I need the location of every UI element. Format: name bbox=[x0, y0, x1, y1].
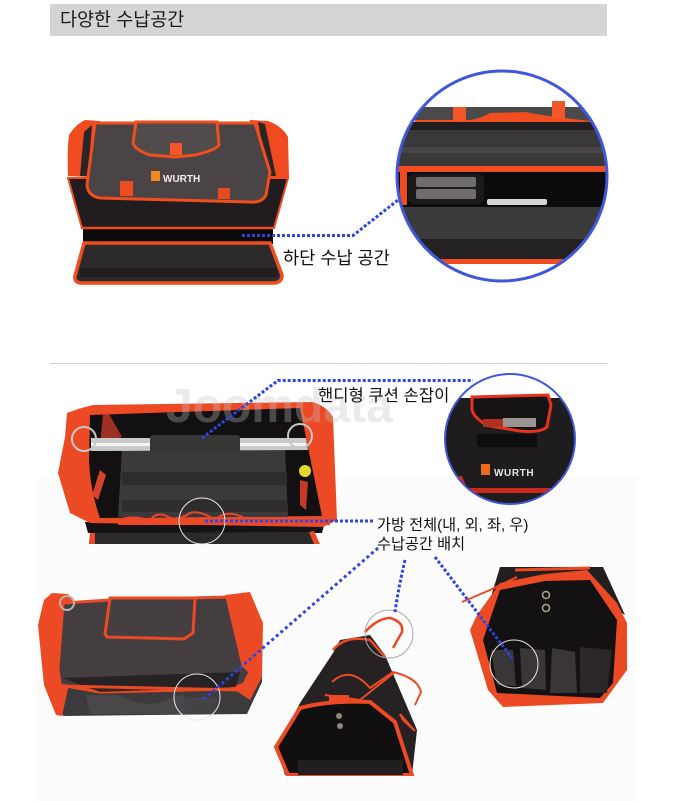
bag photo: open interior with handle bbox=[58, 402, 337, 544]
label: handle: 핸디형 쿠션 손잡이 bbox=[318, 386, 449, 405]
label: whole bag storage: 가방 전체(내, 외, 좌, 우) bbox=[377, 517, 528, 534]
callout line: handle bbox=[202, 380, 473, 438]
white marker circle: inner end pocket bbox=[490, 640, 538, 688]
callout line: lower compartment bbox=[242, 200, 398, 236]
label: lower compartment: 하단 수납 공간 bbox=[283, 248, 390, 268]
label: whole bag storage: 수납공간 배치 bbox=[377, 536, 465, 553]
callout line: inner end pocket bbox=[435, 557, 512, 658]
magnified circle: lower compartment bbox=[390, 70, 615, 284]
magnified circle: handle and logo bbox=[444, 373, 576, 505]
callout line: pockets bbox=[205, 520, 373, 522]
watermark: Joomdata bbox=[166, 380, 393, 433]
bag photo: front with lower compartment bbox=[68, 120, 289, 283]
bag photo: angled side view bbox=[276, 618, 421, 775]
magnified circle: handle and logo: WURTH bbox=[494, 468, 534, 479]
bag photo: front with lower compartment: WURTH bbox=[163, 174, 200, 185]
divider bbox=[50, 362, 607, 364]
bag photo: inner end pockets bbox=[462, 567, 627, 707]
label: whole bag storage bbox=[377, 517, 528, 553]
heading bar: 다양한 수납공간 bbox=[60, 9, 184, 30]
callout line: outer pocket bbox=[203, 548, 378, 700]
bag photo: outer side pockets bbox=[38, 592, 263, 716]
heading bar bbox=[50, 4, 607, 36]
gray marker circle: side handle bbox=[365, 610, 413, 658]
white marker circle: inner pockets bbox=[179, 498, 225, 544]
white marker circle: outer pocket bbox=[174, 674, 220, 720]
callout line: side handle bbox=[395, 560, 405, 612]
